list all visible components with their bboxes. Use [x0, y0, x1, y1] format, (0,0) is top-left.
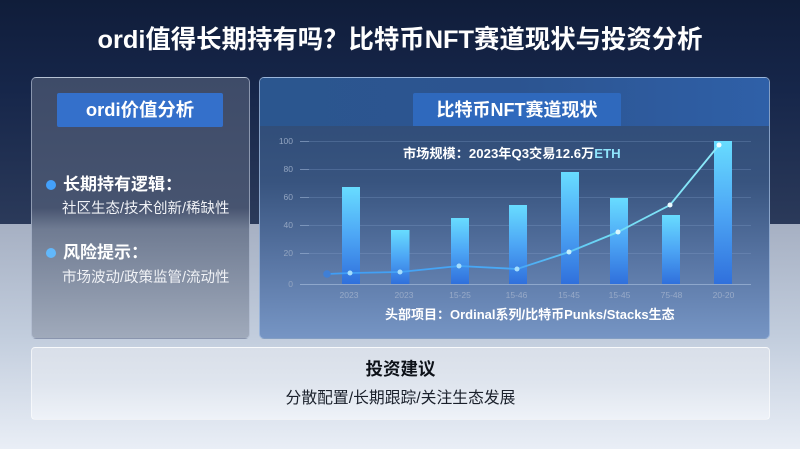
x axis labels: 15-25	[449, 290, 471, 300]
background: dark upper band	[0, 0, 800, 224]
panel: bitcoin NFT market status	[259, 77, 770, 339]
heading: investment advice: 投资建议	[366, 359, 436, 379]
icon: bullet risk	[46, 248, 56, 258]
y axis labels: 100	[279, 136, 293, 146]
x axis labels: 20-20	[713, 290, 735, 300]
subheading: risk warning: 风险提示：	[63, 243, 148, 262]
panel heading: ordi价值分析	[57, 93, 223, 127]
chart caption: market size: 市场规模：2023年Q3交易12.6万ETH	[403, 146, 621, 161]
y axis labels: 80	[284, 164, 293, 174]
panel: investment advice	[31, 347, 770, 420]
y axis labels: 60	[284, 192, 293, 202]
text: long-term holding factors: 社区生态/技术创新/稀缺性	[62, 201, 230, 217]
y axis labels: 0	[288, 279, 293, 289]
panel heading: 比特币NFT赛道现状: 比特币NFT赛道现状	[436, 100, 598, 120]
x axis labels: 2023	[395, 290, 414, 300]
x axis labels	[340, 290, 735, 300]
text: risk factors: 市场波动/政策监管/流动性	[62, 270, 230, 286]
x axis labels: 15-45	[558, 290, 580, 300]
panel heading: ordi价值分析: ordi价值分析	[86, 99, 194, 120]
panel heading: 比特币NFT赛道现状	[413, 93, 621, 126]
title: ordi值得长期持有吗？比特币NFT赛道现状与投资分析	[97, 26, 703, 54]
trend line	[323, 142, 722, 278]
background: light lower band	[0, 224, 800, 449]
panel header band	[260, 78, 769, 126]
x axis labels: 2023	[340, 290, 359, 300]
x axis labels: 15-45	[609, 290, 631, 300]
chart caption: top projects: 头部项目：Ordinal系列/比特币Punks/Stacks生态	[385, 307, 675, 322]
icon: bullet long-term logic	[46, 180, 56, 190]
y axis labels: 40	[284, 220, 293, 230]
bars	[342, 141, 732, 284]
text: advice items: 分散配置/长期跟踪/关注生态发展	[286, 390, 515, 407]
panel: ordi value analysis	[31, 77, 250, 339]
y axis labels	[279, 136, 293, 289]
subheading: long-term holding logic: 长期持有逻辑：	[63, 175, 182, 194]
x axis labels: 15-46	[506, 290, 528, 300]
x axis labels: 75-48	[661, 290, 683, 300]
y axis labels: 20	[284, 248, 293, 258]
